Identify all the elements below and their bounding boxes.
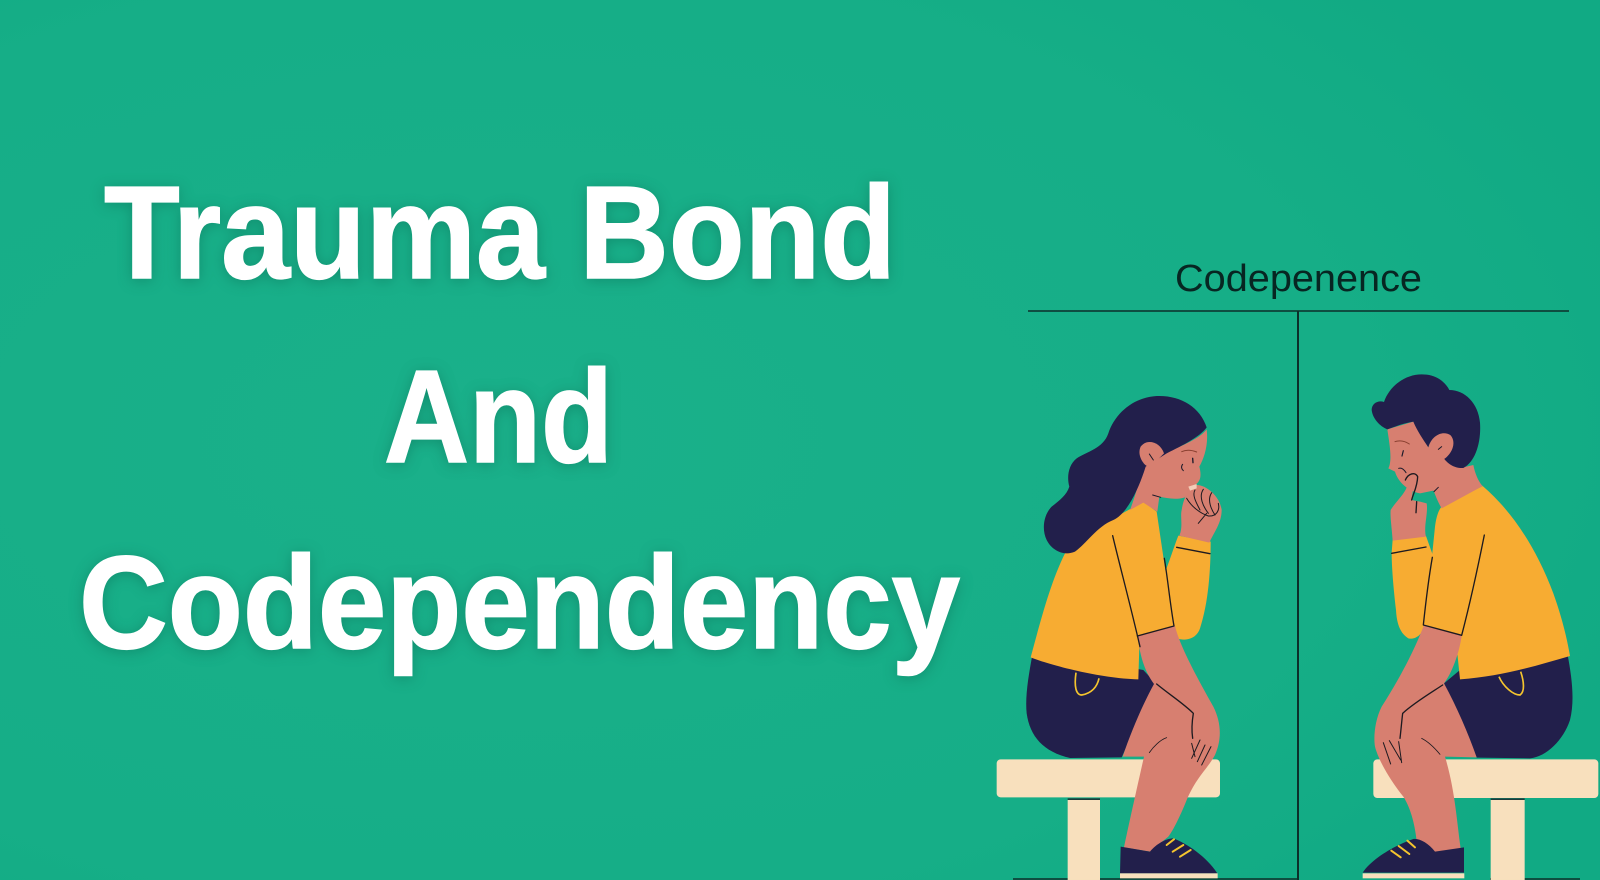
far sleeve (1163, 536, 1211, 640)
bench (997, 759, 1220, 880)
head and neck (1387, 422, 1483, 508)
face details (1149, 450, 1197, 497)
pocket (1499, 672, 1523, 695)
shorts (1444, 655, 1573, 758)
divider: horizontal and vertical lines (1013, 311, 1580, 880)
shoe (1363, 839, 1464, 873)
far sleeve (1392, 536, 1433, 639)
laces (1167, 839, 1191, 857)
hand (1179, 485, 1222, 543)
pocket (1075, 673, 1099, 695)
finger lines and cuff (1392, 474, 1426, 553)
hair (1044, 396, 1207, 553)
laces (1391, 841, 1415, 857)
cuff and outlines (1113, 489, 1219, 765)
arm and leg (1123, 626, 1220, 852)
arm and leg (1374, 625, 1477, 853)
bench (1373, 759, 1598, 880)
figure: man sitting on bench (1363, 374, 1598, 880)
shoe (1120, 838, 1217, 873)
sole (1120, 873, 1218, 878)
title: Trauma Bond And Codependency: Codependency (79, 529, 960, 676)
title: Trauma Bond And Codependency (79, 159, 960, 676)
figure: woman sitting on bench (997, 396, 1222, 880)
title: Trauma Bond And Codependency: Trauma Bond (104, 159, 896, 306)
outlines (1383, 535, 1484, 764)
face details (1395, 441, 1442, 492)
ear (1428, 433, 1453, 459)
heading: Codepenence: Codepenence (1175, 258, 1422, 300)
nail (1188, 484, 1197, 491)
title: Trauma Bond And Codependency: And (384, 343, 613, 490)
head and neck (1130, 429, 1207, 512)
sole (1363, 873, 1464, 878)
ear (1139, 442, 1164, 467)
shirt (1423, 486, 1570, 679)
shirt (1031, 502, 1175, 679)
hair (1372, 374, 1480, 468)
shorts (1026, 655, 1155, 758)
hand (1391, 475, 1427, 541)
